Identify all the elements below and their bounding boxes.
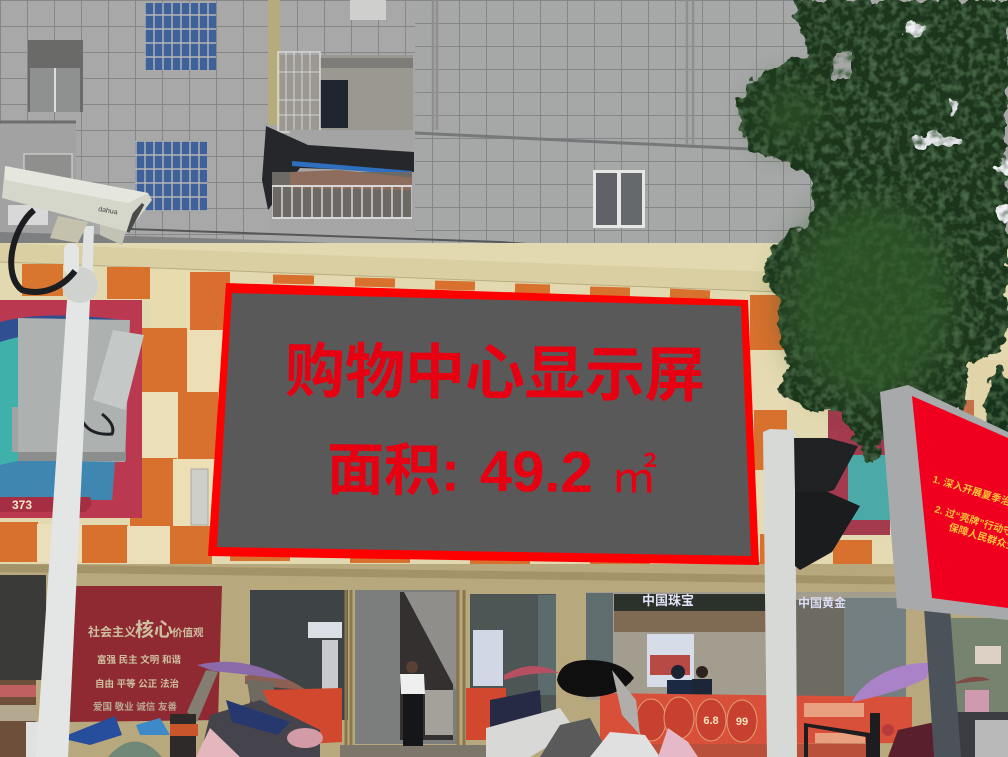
parked scooters and umbrellas	[26, 618, 1008, 757]
traffic signal	[794, 438, 860, 570]
glass shopfront and doorway	[250, 590, 556, 757]
roadside LED sign	[880, 385, 1008, 757]
core values banner: 自由 平等 公正 法治	[95, 678, 179, 690]
jewellery shop window	[586, 592, 906, 700]
screen area: 49.2	[480, 439, 593, 505]
traffic light pole	[763, 429, 797, 757]
sign screen	[912, 396, 1008, 608]
tree foliage	[735, 0, 1008, 463]
core values banner: 价值观	[172, 626, 204, 639]
screen grey face	[217, 293, 751, 556]
storefront level	[0, 564, 1008, 757]
jewellery shop window: 中国黄金	[798, 595, 846, 610]
red promotional counter banner: 99	[736, 716, 748, 728]
pole-mounted equipment box	[12, 318, 144, 462]
screen area: 面积:	[327, 438, 460, 504]
right billboard behind tree	[828, 410, 890, 535]
screen area: ㎡	[611, 440, 657, 507]
red promotional counter banner	[600, 693, 912, 757]
shopping centre checker fascia	[0, 243, 1008, 577]
security camera	[2, 166, 152, 303]
upper building facade	[0, 0, 1008, 290]
screen title: 购物中心显示屏	[285, 338, 705, 409]
lighter foliage mass on lower tree	[758, 85, 955, 400]
core values banner: 社会主义	[88, 624, 136, 639]
screen red frame	[208, 283, 759, 565]
jewellery shop window: 中国珠宝	[642, 593, 694, 608]
sign text	[931, 472, 1008, 562]
LED display screen with area label	[208, 283, 759, 565]
street lamp pole	[36, 300, 90, 757]
security camera: dahua	[98, 206, 118, 216]
windows and balconies	[8, 0, 645, 228]
left billboard: 373	[12, 498, 32, 512]
core values banner	[68, 586, 222, 722]
red promotional counter banner: 6.8	[703, 715, 719, 727]
core values banner: 富强 民主 文明 和谐	[97, 654, 181, 666]
left billboard	[0, 300, 142, 518]
core values banner: 爱国 敬业 诚信 友善	[93, 701, 177, 713]
core values banner: 核心	[135, 618, 173, 641]
man at the door	[400, 661, 425, 746]
